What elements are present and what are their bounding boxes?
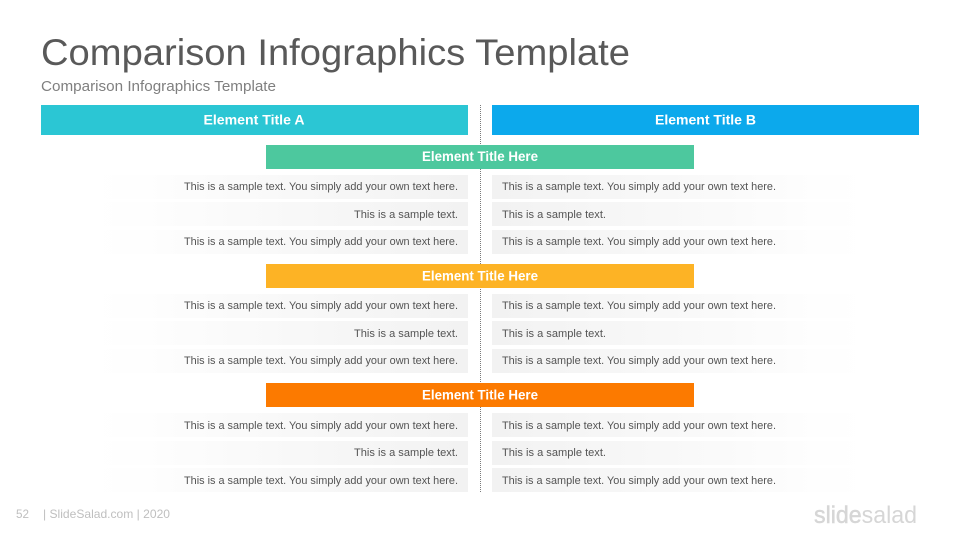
section 2 left rows: This is a sample text. You simply add your own text here. bbox=[184, 300, 458, 312]
section 1 left rows: This is a sample text. You simply add your own text here. bbox=[184, 236, 458, 248]
section 3 heading: Element Title Here bbox=[422, 386, 538, 402]
header: Element Title A: Element Title A bbox=[204, 112, 304, 128]
section 2 right rows bbox=[492, 294, 870, 373]
section 3 left rows: This is a sample text. You simply add your own text here. bbox=[184, 420, 458, 432]
footer page number: 52 bbox=[16, 507, 29, 521]
header: Element Title B: Element Title B bbox=[655, 112, 756, 128]
section 1 bbox=[90, 145, 870, 254]
section 2 left rows bbox=[90, 294, 468, 373]
section 1 heading: Element Title Here bbox=[422, 148, 538, 164]
section 1 left rows: This is a sample text. You simply add your own text here. bbox=[184, 181, 458, 193]
header: Element Title A bbox=[41, 105, 468, 135]
center dotted divider bbox=[480, 105, 482, 493]
section 1 right rows: This is a sample text. You simply add your own text here. bbox=[502, 181, 776, 193]
section 3 right rows bbox=[492, 413, 870, 492]
section 2 right rows: This is a sample text. You simply add your own text here. bbox=[502, 300, 776, 312]
section 1 left rows bbox=[90, 175, 468, 254]
footer credit: | SlideSalad.com | 2020 bbox=[43, 507, 170, 521]
section 1 heading bbox=[266, 145, 694, 169]
section 3 bbox=[90, 383, 870, 492]
section 2 heading: Element Title Here bbox=[422, 268, 538, 284]
section 3 left rows: This is a sample text. You simply add your own text here. bbox=[184, 475, 458, 487]
section 3 right rows: This is a sample text. You simply add your own text here. bbox=[502, 475, 776, 487]
title: Comparison Infographics Template bbox=[41, 32, 630, 73]
section 3 right rows: This is a sample text. bbox=[502, 447, 606, 459]
section 3 heading bbox=[266, 383, 694, 407]
header: Element Title B bbox=[492, 105, 919, 135]
section 1 right rows: This is a sample text. bbox=[502, 209, 606, 221]
section 2 heading bbox=[266, 264, 694, 288]
section 3 left rows: This is a sample text. bbox=[354, 447, 458, 459]
section 2 right rows: This is a sample text. bbox=[502, 328, 606, 340]
section 2 right rows: This is a sample text. You simply add your own text here. bbox=[502, 355, 776, 367]
section 1 right rows bbox=[492, 175, 870, 254]
section 2 bbox=[90, 264, 870, 373]
section 2 left rows: This is a sample text. bbox=[354, 328, 458, 340]
subtitle: Comparison Infographics Template bbox=[41, 78, 276, 95]
section 1 right rows: This is a sample text. You simply add your own text here. bbox=[502, 236, 776, 248]
section 3 left rows bbox=[90, 413, 468, 492]
section 3 right rows: This is a sample text. You simply add your own text here. bbox=[502, 420, 776, 432]
logo: slidesalad: slidesalad bbox=[814, 502, 917, 529]
section 1 left rows: This is a sample text. bbox=[354, 209, 458, 221]
section 2 left rows: This is a sample text. You simply add your own text here. bbox=[184, 355, 458, 367]
